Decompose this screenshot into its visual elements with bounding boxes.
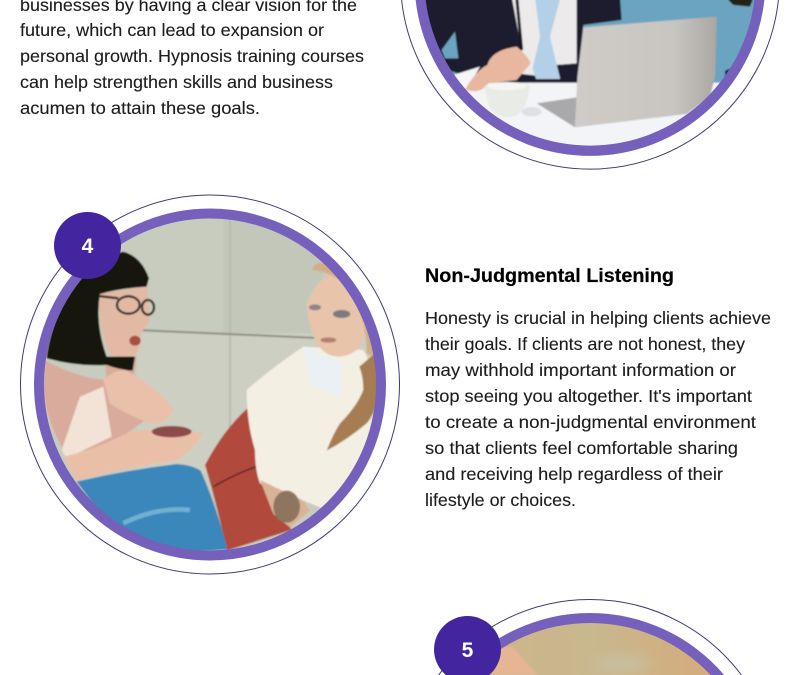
text block: non-judgmental listening description: may withhold important information or xyxy=(425,360,736,380)
number badge 4 xyxy=(54,212,121,279)
text block: section 3 closing paragraph: acumen to attain these goals. xyxy=(20,98,260,118)
text block: non-judgmental listening description: stop seeing you altogether. It's important xyxy=(425,386,752,406)
photo circle: businessman with laptop xyxy=(401,0,779,170)
text: 5 xyxy=(462,639,474,662)
text block: section 3 closing paragraph: can help strengthen skills and business xyxy=(20,72,333,92)
text block: non-judgmental listening description: and receiving help regardless of their xyxy=(425,464,723,484)
number badge 5 xyxy=(434,624,501,675)
text block: section 3 closing paragraph xyxy=(20,0,364,118)
text block: non-judgmental listening description xyxy=(425,308,771,510)
photo circle: two women talking xyxy=(10,190,410,590)
text block: section 3 closing paragraph: future, which can lead to expansion or xyxy=(20,20,324,40)
photo circle: section 5 image xyxy=(438,599,742,675)
text block: non-judgmental listening description: lifestyle or choices. xyxy=(425,490,576,510)
text block: non-judgmental listening description: Honesty is crucial in helping clients achieve xyxy=(425,308,771,328)
text block: section 3 closing paragraph: personal growth. Hypnosis training courses xyxy=(20,46,364,66)
number badge 4: 4 xyxy=(82,235,94,258)
text block: non-judgmental listening description: so that clients feel comfortable sharing xyxy=(425,438,738,458)
text block: non-judgmental listening description: to create a non-judgmental environment xyxy=(425,412,756,432)
text block: non-judgmental listening description: their goals. If clients are not honest, they xyxy=(425,334,745,354)
heading: Non-Judgmental Listening: Non-Judgmental Listening xyxy=(425,265,674,287)
